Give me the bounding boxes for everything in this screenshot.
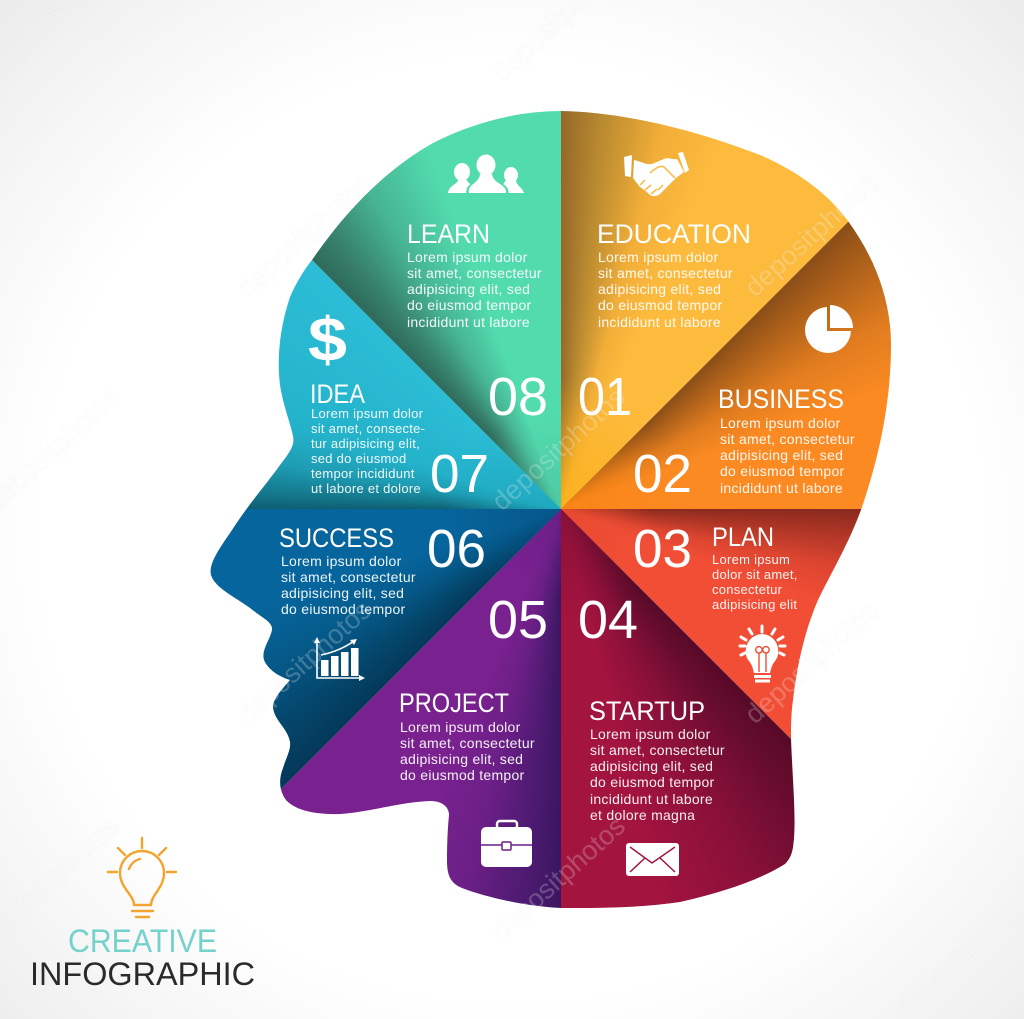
icon: outline bulb	[108, 838, 176, 917]
text: learn body: Lorem ipsum dolor	[407, 249, 528, 265]
panel: 06 success	[210, 509, 561, 789]
title: education: EDUCATION	[597, 219, 751, 249]
panel: 04 startup	[561, 509, 795, 908]
panel: 02 business	[561, 222, 891, 509]
icon: envelope	[626, 843, 679, 876]
text: plan body: adipisicing elit	[712, 597, 797, 612]
title: idea: IDEA	[310, 379, 365, 409]
text: learn body	[407, 249, 542, 330]
text: idea body: sed do eiusmod	[311, 451, 407, 466]
text: success body: adipisicing elit, sed	[281, 585, 404, 601]
title: creative: CREATIVE	[68, 923, 217, 959]
watermark: depositphotos	[739, 168, 884, 302]
text: business body: adipisicing elit, sed	[720, 447, 843, 463]
text: success body	[281, 553, 416, 617]
text: idea body	[311, 406, 425, 496]
text: project body	[400, 719, 535, 783]
icon: pie chart	[805, 305, 853, 353]
text: learn body: adipisicing elit, sed	[407, 281, 530, 297]
text: startup body	[590, 726, 725, 823]
number: 08: 08	[488, 367, 548, 427]
watermark: depositphotos	[486, 811, 631, 945]
title: infographic: INFOGRAPHIC	[30, 956, 255, 992]
text: education body: adipisicing elit, sed	[598, 281, 721, 297]
text: idea body: Lorem ipsum dolor	[311, 406, 424, 421]
text: business body: sit amet, consectetur	[720, 431, 855, 447]
number: 05: 05	[488, 590, 548, 650]
text: plan body	[712, 552, 798, 612]
text: startup body: sit amet, consectetur	[590, 742, 725, 758]
icon: bar chart	[314, 637, 365, 681]
panel: 07 idea	[246, 260, 561, 509]
text: plan body: dolor sit amet,	[712, 567, 798, 582]
text: project body: do eiusmod tempor	[400, 767, 524, 783]
text: idea body: tur adipisicing elit,	[311, 436, 420, 451]
title: business: BUSINESS	[718, 384, 844, 414]
title: learn: LEARN	[407, 219, 490, 249]
text: idea body: tempor incididunt	[311, 466, 415, 481]
text: education body	[598, 249, 733, 330]
text: education body: sit amet, consectetur	[598, 265, 733, 281]
text: project body: adipisicing elit, sed	[400, 751, 523, 767]
panel: 08 learn	[312, 111, 561, 509]
title: startup: STARTUP	[589, 696, 705, 726]
watermark: depositphotos	[232, 595, 377, 729]
text: startup body: et dolore magna	[590, 807, 695, 823]
text: success body: do eiusmod tempor	[281, 601, 405, 617]
text: startup body: Lorem ipsum dolor	[590, 726, 711, 742]
text: education body: incididunt ut labore	[598, 314, 721, 330]
number: 02: 02	[633, 444, 692, 504]
number: 06: 06	[427, 519, 486, 579]
watermark: depositphotos	[739, 595, 884, 729]
text: learn body: do eiusmod tempor	[407, 297, 531, 313]
text: education body: do eiusmod tempor	[598, 297, 722, 313]
icon: dollar: $	[308, 306, 347, 375]
text: business body: incididunt ut labore	[720, 480, 843, 496]
title: project: PROJECT	[399, 688, 509, 718]
panel: 01 education	[561, 111, 848, 509]
number: 01: 01	[578, 367, 632, 427]
text: startup body: do eiusmod tempor	[590, 774, 714, 790]
icon: light bulb	[740, 626, 785, 681]
number: 04: 04	[578, 590, 638, 650]
title: success: SUCCESS	[279, 523, 394, 553]
text: project body: sit amet, consectetur	[400, 735, 535, 751]
text: startup body: incididunt ut labore	[590, 791, 713, 807]
icon: handshake	[624, 152, 689, 196]
text: business body: do eiusmod tempor	[720, 463, 844, 479]
text: idea body: sit amet, consecte-	[311, 421, 425, 436]
panel: 03 plan	[561, 509, 862, 740]
text: startup body: adipisicing elit, sed	[590, 758, 713, 774]
watermark: depositphotos	[232, 168, 377, 302]
text: business body	[720, 415, 855, 496]
text: plan body: Lorem ipsum	[712, 552, 790, 567]
text: project body: Lorem ipsum dolor	[400, 719, 521, 735]
logo: creative infographic	[30, 836, 255, 992]
text: education body: Lorem ipsum dolor	[598, 249, 719, 265]
number: 03: 03	[633, 519, 692, 579]
text: learn body: incididunt ut labore	[407, 314, 530, 330]
text: success body: sit amet, consectetur	[281, 569, 416, 585]
icon: briefcase	[481, 821, 532, 867]
text: learn body: sit amet, consectetur	[407, 265, 542, 281]
panel: 05 project	[281, 509, 561, 908]
icon: people	[448, 153, 524, 193]
number: 07: 07	[430, 444, 489, 504]
watermark: depositphotos	[486, 382, 631, 516]
text: business body: Lorem ipsum dolor	[720, 415, 841, 431]
text: plan body: consectetur	[712, 582, 783, 597]
text: idea body: ut labore et dolore	[311, 481, 421, 496]
title: plan: PLAN	[712, 522, 774, 552]
text: success body: Lorem ipsum dolor	[281, 553, 402, 569]
